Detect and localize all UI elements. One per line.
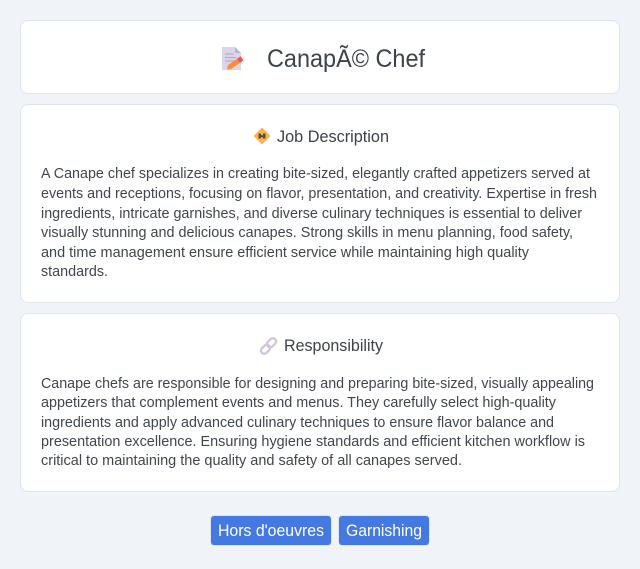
text block: responsibility	[41, 376, 594, 469]
text block: job description: events and receptions, focusing on flavor, presentation, and creativity. Expertise in fresh	[41, 186, 597, 202]
text block: job description: visually stunning and delicious canapes. Strong skills in menu planning, food safety,	[41, 225, 573, 241]
text block: responsibility: critical to maintaining the quality and safety of all canapes served.	[41, 453, 462, 469]
text block: responsibility: Canape chefs are responsible for designing and preparing bite-sized, visually appealing	[41, 376, 594, 392]
tag label: Hors d'oeuvres: Hors d'oeuvres	[218, 521, 324, 540]
text block: job description: and time management ensure efficient service while maintaining high quality	[41, 245, 530, 261]
text block: responsibility: appetizers that complement events and menus. They carefully select high-quality	[41, 395, 557, 411]
icon: document with pencil	[222, 47, 244, 70]
tag: Garnishing background	[339, 516, 429, 545]
icon: orange diamond	[254, 128, 270, 144]
icon: chain link	[260, 337, 277, 355]
panel: title card	[20, 20, 620, 94]
panel: responsibility card	[20, 313, 620, 492]
text block: responsibility: ingredients and apply advanced culinary techniques to ensure flavor balance and	[41, 415, 554, 431]
text block: job description: A Canape chef specializes in creating bite-sized, elegantly crafted appetizers served at	[41, 166, 590, 182]
text block: responsibility: presentation excellence. Ensuring hygiene standards and efficient kitchen workflow is	[41, 434, 585, 450]
text block: job description: ingredients, intricate garnishes, and diverse culinary techniques is essential to deliver	[41, 206, 582, 222]
tag label: Garnishing: Garnishing	[346, 521, 422, 540]
text block: job description: standards.	[41, 264, 108, 280]
panel: job description card	[20, 104, 620, 303]
heading: Responsibility: Responsibility	[284, 336, 384, 355]
title: CanapÃ© Chef	[267, 44, 425, 73]
text block: job description	[41, 166, 597, 280]
tag: Hors d'oeuvres background	[211, 516, 331, 545]
heading: Job Description: Job Description	[277, 127, 389, 146]
